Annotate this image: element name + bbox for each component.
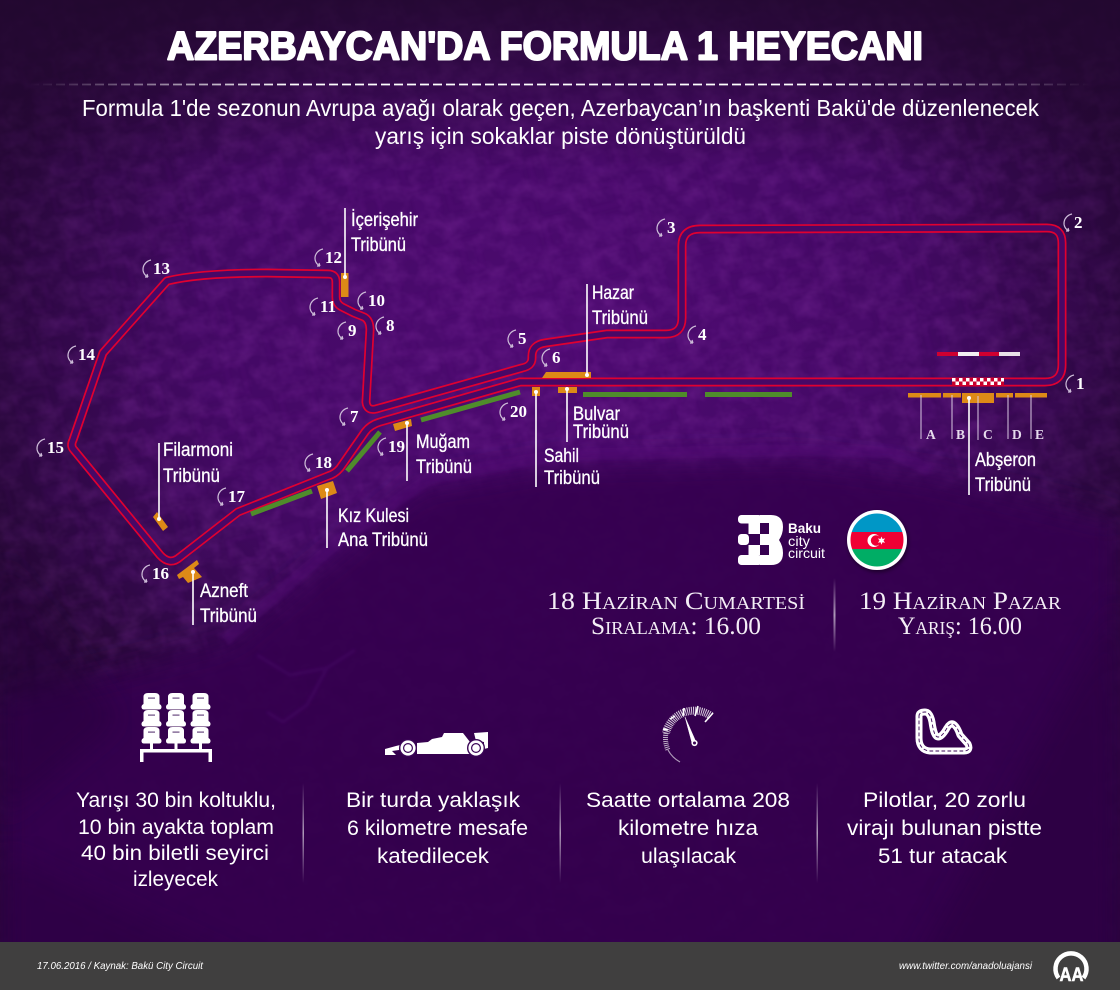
icon: speedometer bbox=[663, 706, 713, 762]
turn 10: 10 bbox=[368, 291, 385, 310]
footer bar bbox=[0, 942, 1120, 990]
subtitle bbox=[82, 95, 1039, 149]
turn 2 bbox=[1064, 213, 1082, 232]
grandstand: Hazar: Tribünü bbox=[592, 308, 648, 329]
turn 7: 7 bbox=[350, 407, 359, 426]
grandstand: Sahil: Tribünü bbox=[544, 468, 600, 489]
turn 7 bbox=[340, 407, 359, 426]
turn 4: 4 bbox=[698, 325, 707, 344]
grandstand: Sahil: Sahil bbox=[544, 446, 579, 467]
grandstand: İçerişehir: Tribünü bbox=[351, 235, 406, 256]
stat: seats: izleyecek bbox=[133, 867, 218, 891]
stat: laps: Pilotlar, 20 zorlu bbox=[863, 788, 1026, 812]
grandstand: Muğam: Tribünü bbox=[416, 457, 472, 478]
stat: distance: 6 kilometre mesafe bbox=[347, 816, 528, 840]
turn 18 bbox=[305, 453, 332, 472]
turn 6 bbox=[542, 348, 560, 367]
divider bbox=[302, 783, 304, 883]
logo: AA: AA bbox=[1060, 965, 1084, 986]
turn 20: 20 bbox=[510, 402, 527, 421]
grandstand: Abşeron A-E: A bbox=[926, 427, 936, 442]
turn 4 bbox=[688, 325, 707, 344]
grandstand: Kız Kulesi: Kız Kulesi bbox=[338, 506, 409, 527]
saturday qualifying: 18 Haziran Cumartesi bbox=[547, 588, 805, 615]
sunday race bbox=[859, 588, 1061, 640]
stat: laps: 51 tur atacak bbox=[878, 844, 1007, 868]
stat: distance bbox=[346, 788, 528, 868]
grandstand: İçerişehir: İçerişehir bbox=[351, 210, 419, 231]
turn 15 bbox=[37, 438, 64, 457]
turn 11 bbox=[310, 297, 336, 316]
turn 20 bbox=[500, 402, 527, 421]
grandstand: Hazar bbox=[542, 283, 648, 378]
stat: seats: 40 bin biletli seyirci bbox=[81, 841, 269, 865]
stat: laps bbox=[847, 788, 1042, 868]
turn 5: 5 bbox=[518, 329, 526, 348]
logo: Baku City Circuit: circuit bbox=[788, 545, 825, 561]
saturday qualifying: Sıralama: 16.00 bbox=[591, 613, 761, 640]
grandstand: Abşeron A-E: Abşeron bbox=[975, 450, 1036, 471]
stat: seats bbox=[76, 788, 276, 891]
subtitle: yarış için sokaklar piste dönüştürüldü bbox=[375, 123, 746, 149]
sunday race: 19 Haziran Pazar bbox=[859, 588, 1061, 615]
title: AZERBAYCAN'DA FORMULA 1 HEYECANI bbox=[167, 24, 923, 68]
grandstand: İçerişehir bbox=[341, 208, 419, 297]
grandstand: Sahil bbox=[532, 387, 600, 489]
icon: F1 car bbox=[385, 732, 488, 757]
dashed divider bbox=[30, 84, 1090, 86]
turn 10 bbox=[358, 291, 385, 310]
turn 19 bbox=[378, 437, 405, 456]
grandstand: Filarmoni: Tribünü bbox=[163, 466, 220, 487]
logo: Baku City Circuit: city bbox=[788, 533, 810, 549]
grandstand: Hazar: Hazar bbox=[592, 283, 635, 304]
divider bbox=[560, 783, 561, 883]
turn 11: 11 bbox=[320, 297, 336, 316]
turn 9 bbox=[338, 321, 356, 340]
grandstand: Abşeron A-E bbox=[908, 393, 1047, 496]
footer source: 17.06.2016 / Kaynak: Bakü City Circuit bbox=[37, 961, 204, 972]
logo: Baku City Circuit bbox=[738, 515, 825, 565]
turn 16 bbox=[142, 564, 169, 583]
grandstand: Filarmoni bbox=[153, 440, 233, 531]
turn 9: 9 bbox=[348, 321, 356, 340]
turn 18: 18 bbox=[315, 453, 332, 472]
grandstand: Azneft bbox=[177, 560, 257, 627]
grandstand: Muğam: Muğam bbox=[416, 432, 470, 453]
grandstand: Bulvar bbox=[558, 387, 629, 443]
turn 17: 17 bbox=[228, 487, 246, 506]
stat: seats: 10 bin ayakta toplam bbox=[78, 815, 274, 839]
divider bbox=[816, 783, 818, 883]
icon: seats bbox=[140, 693, 212, 762]
turn 1 bbox=[1066, 374, 1084, 393]
stat: speed: kilometre hıza bbox=[618, 816, 758, 840]
grandstand: Abşeron A-E: Tribünü bbox=[975, 475, 1031, 496]
turn 8: 8 bbox=[386, 316, 394, 335]
sunday race: Yarış: 16.00 bbox=[898, 613, 1022, 640]
grandstand: Kız Kulesi: Ana Tribünü bbox=[338, 530, 428, 551]
turn 12 bbox=[315, 248, 342, 267]
turn 2: 2 bbox=[1074, 213, 1082, 232]
circuit map bbox=[37, 208, 1085, 627]
turn 13: 13 bbox=[153, 259, 170, 278]
divider line bbox=[834, 578, 836, 652]
turn 3 bbox=[657, 218, 676, 237]
track line bbox=[72, 228, 1062, 561]
stat: distance: Bir turda yaklaşık bbox=[346, 788, 520, 812]
subtitle: Formula 1'de sezonun Avrupa ayağı olarak geçen, Azerbaycan’ın başkenti Bakü'de düzenlenecek bbox=[82, 95, 1039, 121]
grandstand: Abşeron A-E: C bbox=[983, 427, 993, 442]
stat: speed: Saatte ortalama 208 bbox=[586, 788, 790, 812]
turn 8 bbox=[376, 316, 394, 335]
grandstand: Muğam bbox=[393, 419, 472, 481]
turn 19: 19 bbox=[388, 437, 405, 456]
turn 12: 12 bbox=[325, 248, 342, 267]
grandstand: Filarmoni: Filarmoni bbox=[163, 440, 233, 461]
grandstand: Abşeron A-E: E bbox=[1035, 427, 1044, 442]
grandstand: Bulvar: Tribünü bbox=[573, 422, 629, 443]
turn 15: 15 bbox=[47, 438, 64, 457]
icon: Azerbaijan flag bbox=[847, 510, 907, 570]
turn 17 bbox=[218, 487, 246, 506]
turn 14: 14 bbox=[78, 345, 96, 364]
stat: speed: ulaşılacak bbox=[641, 844, 736, 868]
turn 16: 16 bbox=[152, 564, 169, 583]
turn 14 bbox=[68, 345, 96, 364]
logo: Baku City Circuit: Baku bbox=[788, 520, 821, 536]
start grid bar bbox=[937, 352, 1020, 356]
schedule bbox=[547, 578, 1061, 652]
turn 1: 1 bbox=[1076, 374, 1084, 393]
grandstand: Abşeron A-E: D bbox=[1012, 427, 1022, 442]
logo: AA bbox=[1055, 953, 1086, 986]
turn 6: 6 bbox=[552, 348, 560, 367]
grandstand: Azneft: Azneft bbox=[200, 581, 249, 602]
stat: laps: virajı bulunan pistte bbox=[847, 816, 1042, 840]
footer twitter: www.twitter.com/anadoluajansi bbox=[899, 960, 1033, 972]
grandstand: Kız Kulesi bbox=[317, 481, 428, 551]
stat: seats: Yarışı 30 bin koltuklu, bbox=[76, 788, 276, 812]
turn 13 bbox=[143, 259, 170, 278]
green barriers bbox=[251, 392, 792, 514]
stat: speed bbox=[586, 788, 790, 868]
saturday qualifying bbox=[547, 588, 805, 640]
checkered start line bbox=[952, 378, 1004, 386]
grandstand: Bulvar: Bulvar bbox=[573, 404, 621, 425]
stat: distance: katedilecek bbox=[377, 844, 489, 868]
icon: circuit bbox=[919, 712, 969, 751]
turn 3: 3 bbox=[667, 218, 676, 237]
grandstand: Azneft: Tribünü bbox=[200, 606, 257, 627]
turn 5 bbox=[508, 329, 526, 348]
grandstand: Abşeron A-E: B bbox=[956, 427, 965, 442]
